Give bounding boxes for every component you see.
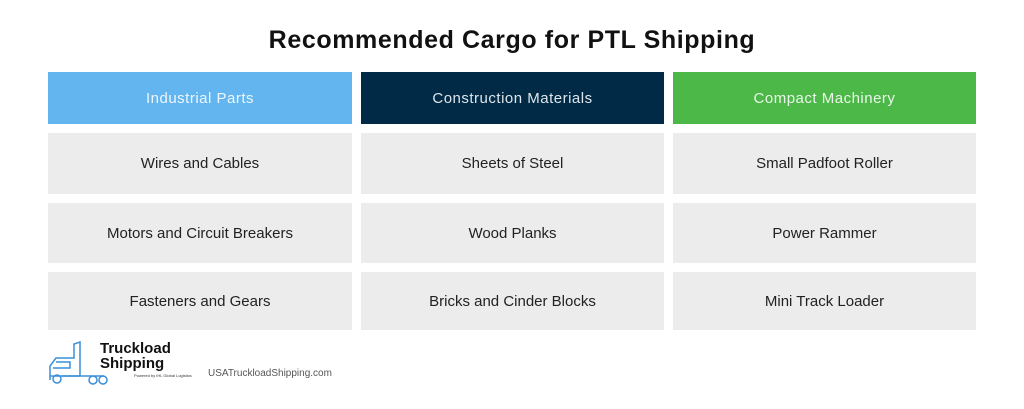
cell — [48, 203, 352, 263]
cell: Sheets of Steel — [462, 155, 563, 172]
cell: Bricks and Cinder Blocks — [429, 292, 596, 310]
cell — [673, 133, 976, 194]
cell: Power Rammer — [772, 224, 877, 242]
header: Compact Machinery: Compact Machinery — [754, 90, 895, 106]
header: Industrial Parts: Industrial Parts — [146, 90, 254, 106]
header: Compact Machinery — [673, 72, 976, 124]
website url: USATruckloadShipping.com — [208, 368, 332, 379]
tagline: Powered by IHL Global Logistics — [134, 373, 192, 378]
header: Construction Materials: Construction Materials — [432, 90, 593, 106]
cell: Small Padfoot Roller — [756, 155, 893, 172]
cell: Wood Planks — [468, 224, 557, 242]
logo — [49, 340, 192, 385]
brand text — [100, 340, 171, 372]
brand text: Shipping — [100, 355, 164, 372]
cell — [361, 272, 664, 330]
icon: truck — [49, 341, 108, 385]
cell: Mini Track Loader — [765, 292, 884, 310]
cell — [673, 272, 976, 330]
title: Recommended Cargo for PTL Shipping — [269, 26, 755, 54]
cell — [48, 272, 352, 330]
cell — [361, 133, 664, 194]
cell: Wires and Cables — [141, 155, 259, 172]
cell — [48, 133, 352, 194]
cell: Fasteners and Gears — [130, 292, 270, 310]
cell — [673, 203, 976, 263]
header: Construction Materials — [361, 72, 664, 124]
cell — [361, 203, 664, 263]
header: Industrial Parts — [48, 72, 352, 124]
brand text: Truckload — [100, 340, 171, 357]
cell: Motors and Circuit Breakers — [107, 224, 293, 242]
